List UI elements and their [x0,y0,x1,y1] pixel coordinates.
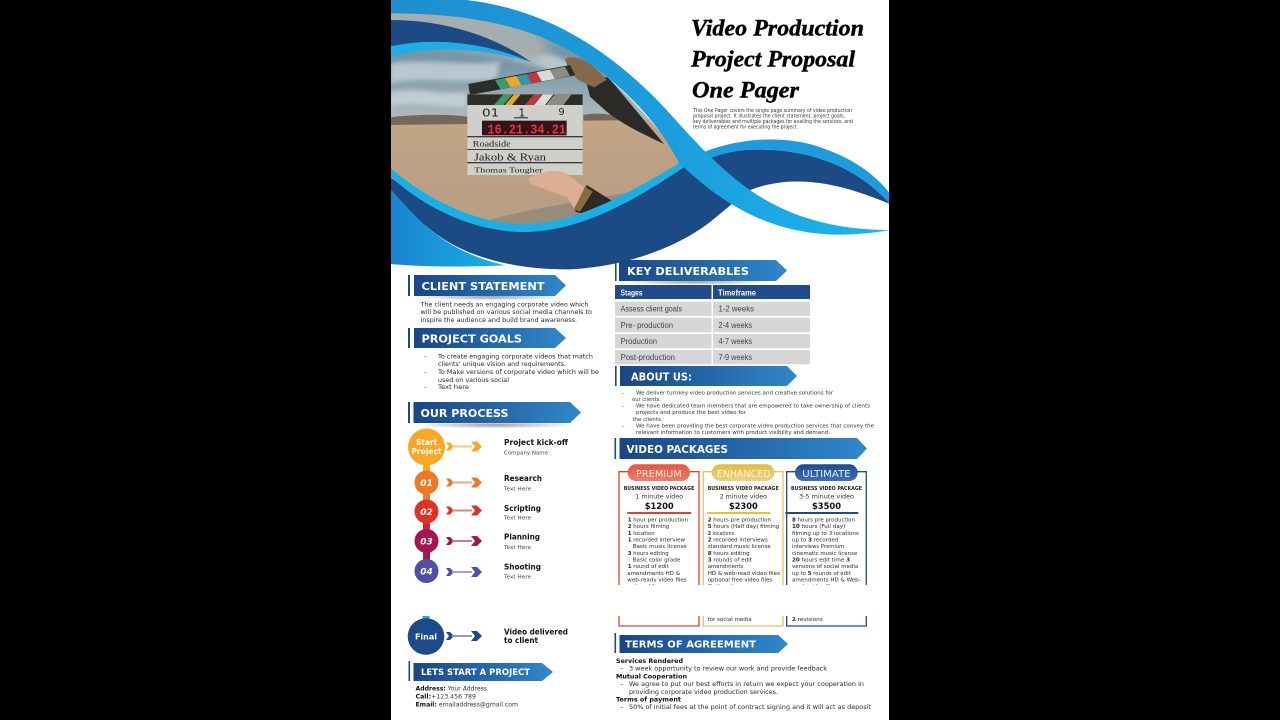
about us list: We have dedicated team members that are empowered to take ownership of clients [636,404,870,410]
final step: video delivered: Video delivered [504,628,568,636]
step: shooting [414,559,541,583]
package: enhanced: standard music license [708,544,771,550]
package: premium: 1 location [628,531,655,537]
heading: project goals [408,328,566,348]
package: premium: optional free [627,584,664,590]
heading: our process: OUR PROCESS [420,407,509,420]
final step: video delivered: Final [415,632,437,642]
table: stages and timeframe: Assess client goals [620,304,682,314]
about us list: our clients. [632,397,661,403]
package: premium: 1 round of edit [628,564,669,570]
title: Project Proposal [690,46,856,72]
table: stages and timeframe: 2-4 weeks [718,321,752,330]
package: premium: $1200 [645,502,674,512]
client statement text: The client needs an engaging corporate video which [419,302,589,308]
page background [391,0,889,720]
step: planning [414,529,540,562]
project goals list [424,354,599,391]
terms of agreement text: We agree to put our best efforts in return we expect your cooperation in [629,680,864,688]
about us list: We have been providing the best corporate video production services that convey the [636,424,874,430]
package: enhanced: $2300 [729,502,758,512]
client statement text: will be published on various social media channels to [420,309,592,316]
step: shooting: Shooting [504,562,541,571]
table: stages and timeframe: Timeframe [718,288,757,298]
project goals list: – [424,369,427,376]
table: stages and timeframe [615,285,810,364]
package: ultimate: filming up to 3 locations [792,531,859,537]
step: shooting: Text Here [503,574,532,580]
package remainders after the page break: 2 revisions [792,617,823,623]
project goals list: – [424,384,427,391]
package: premium: 2 hours filming [628,524,670,530]
package: ultimate: 10 hours (Full day) [792,524,845,530]
terms of agreement text: – [620,703,623,711]
heading: about us: ABOUT US: [631,370,692,384]
about us list: We deliver turnkey video production services and creative solutions for [636,390,834,396]
about us list: projects and produce the best video for [636,410,747,416]
photo: clapperboard in the desert [391,13,680,224]
heading: client statement [408,275,566,300]
table: stages and timeframe: 1-2 weeks [718,304,754,314]
package: ultimate: 3-5 minute video [799,492,854,500]
package: enhanced: 2 minute video [720,492,767,500]
package: premium: amendments HD & [627,571,681,577]
package: enhanced: HD & web-read video files [708,571,780,577]
package: enhanced: 2 hours pre production [708,518,771,524]
step: start project: Company Name [504,450,549,456]
package: ultimate: up to 5 rounds of edit [792,571,851,577]
project goals list: To Make versions of corporate video which will be [437,369,599,376]
package: ultimate: interviews Premium [792,544,844,550]
terms of agreement text: – [620,680,623,688]
final step: video delivered: to client [504,636,538,645]
contact details: Address: Your Address [416,685,488,693]
title [690,16,864,102]
table: stages and timeframe: 4-7 weeks [718,337,752,346]
project goals list: To create engaging corporate videos that match [437,354,593,360]
package: enhanced [703,464,783,626]
step: start project [408,428,569,474]
wave: navy lower [390,150,890,269]
package: premium: BUSINESS VIDEO PACKAGE [624,486,695,492]
heading: about us [615,366,797,386]
package: ultimate: $3500 [812,502,841,512]
step: research: 01 [420,479,433,489]
heading: video packages [614,438,867,459]
page break gap [391,585,889,616]
package: ultimate: cinematic music license [792,551,858,557]
project goals list: clients' unique vision and requirements. [438,361,566,368]
heading: terms of agreement: TERMS OF AGREEMENT [625,640,756,651]
package: ultimate: 20 hours edit time 3 [792,558,850,564]
table: stages and timeframe: Post-production [620,353,675,362]
step: planning: Text Here [503,545,532,551]
about us list [622,390,874,436]
package: premium: 3 hours editing [628,551,669,557]
about us list: – [622,424,625,430]
intro text: proposal project. It illustrates the client statement, project goals, [693,114,845,120]
step: scripting: Text Here [503,516,532,522]
package: premium: Basic music license [633,544,687,550]
package: premium: web-ready video files [627,578,687,584]
step: research: Text Here [503,487,532,493]
header wave artwork with photo [377,0,890,269]
step: research [414,470,542,502]
process timeline [408,428,569,583]
icon: clapperboard slate: Roadside [473,140,511,149]
heading: lets start a project: LETS START A PROJECT [421,668,530,678]
heading: project goals: PROJECT GOALS [422,333,522,346]
icon: clapper stick [468,65,575,95]
icon: clapperboard slate: 9 [558,107,565,118]
step: scripting [414,500,541,532]
package: premium: PREMIUM [636,469,682,480]
heading: lets start a project [408,661,553,681]
project goals list: used on various social [438,377,509,384]
package: ultimate: up to 3 recorded [792,538,839,544]
icon: lower hand and wrist [528,171,613,217]
table: stages and timeframe: Stages [620,288,643,298]
client statement text [419,302,592,324]
package: enhanced: optional free video files [708,578,772,584]
wave: cyan upper left [390,42,532,62]
table: stages and timeframe: Pre- production [620,321,673,330]
package: ultimate: amendments HD & Web- [792,578,861,584]
package: enhanced: ENHANCED [717,469,771,480]
wave: main swoosh [390,0,890,235]
package: enhanced: 2 locations [708,531,734,537]
terms of agreement text: Mutual Cooperation [616,672,687,680]
package: enhanced: 8 hours editing [708,551,750,557]
intro text: terms of agreement for executing the project. [693,125,798,131]
terms of agreement text: 3 week opportunity to review our work and provide feedback [629,665,827,673]
title: One Pager [692,78,800,102]
package: premium [619,464,699,626]
step: shooting: 04 [420,568,433,578]
package: enhanced: 5 hours (Half day) filming [708,524,780,530]
heading: key deliverables: KEY DELIVERABLES [627,265,749,278]
contact details: Call:+123 456 789 [416,693,476,701]
package: enhanced: BUSINESS VIDEO PACKAGE [708,486,779,492]
icon: clapperboard slate: Thomas Tougher [474,166,543,175]
terms of agreement text: Services Rendered [616,657,683,665]
intro text: key deliverables and multiple packages for availing the services, and [693,119,853,125]
intro text [692,108,853,131]
terms of agreement text: – [620,665,623,673]
package: ultimate: ULTIMATE [802,469,851,480]
project goals list: – [424,354,427,360]
package remainders after the page break [708,617,823,623]
package: premium: 1 recorded interview [628,538,685,544]
heading: our process [408,402,581,428]
package: enhanced: 3 rounds of edit [708,558,753,564]
icon: clapperboard slate: 16.21.34.21 [487,123,566,139]
package: ultimate: 8 hours pre production [792,518,855,524]
package: enhanced: amendments [708,564,743,570]
icon: clapperboard slate [467,94,583,175]
package: enhanced: Optional [708,584,733,590]
package remainders after the page break: for social media [708,617,752,623]
step: research: Research [504,474,542,483]
contact details: Email: emailaddress@gmail.com [416,701,518,709]
terms of agreement text [616,657,871,711]
heading: key deliverables [615,260,787,285]
client statement text: inspire the audience and build brand awareness. [420,317,577,324]
about us list: the clients. [632,417,663,423]
final step: video delivered [408,616,568,655]
project goals list: Text here [437,384,469,391]
wave: cyan right arc [705,140,889,203]
intro text: This One Pager covers the single page summary of video production [692,108,852,114]
heading: client statement: CLIENT STATEMENT [422,280,545,293]
wave: cyan under photo [390,163,683,232]
terms of agreement text: Terms of payment [616,696,681,704]
terms of agreement text: providing corporate video production services. [629,688,778,696]
step: start project: Project kick-off [504,438,569,447]
title: Video Production [691,16,864,40]
package: premium: Basic color grade [633,558,681,564]
icon: clapperboard slate: 1 [518,107,525,120]
icon: clapperboard slate: Jakob & Ryan [474,153,546,164]
wave: light blue lower left [391,190,505,266]
package: ultimate: BUSINESS VIDEO PACKAGE [791,486,863,492]
icon: clapperboard slate: 01 [482,107,499,120]
step: start project: Project [411,447,442,456]
wave: navy upper left [390,20,532,62]
package: ultimate: versions of social media [792,564,858,570]
step: scripting: Scripting [504,504,541,513]
package: premium: 1 hour per production [628,518,688,524]
icon: sleeve and upper hand [565,57,664,144]
terms of agreement text: 50% of initial fees at the point of contract signing and it will act as deposit [629,703,871,711]
package: ultimate: ready video files [792,584,837,590]
step: start project: Start [416,438,438,447]
package: premium: 1 minute video [635,492,683,500]
heading: terms of agreement [614,633,788,653]
contact details [416,685,518,709]
heading: video packages: VIDEO PACKAGES [626,443,728,456]
table: stages and timeframe: 7-9 weeks [718,353,752,362]
step: planning: Planning [504,533,540,542]
step: scripting: 02 [420,508,433,518]
package: ultimate [786,464,866,626]
about us list: relevant information to customers with product visibility and demand. [636,430,830,436]
step: planning: 03 [420,538,433,548]
package: enhanced: 2 recorded interviews [708,538,768,544]
about us list: – [622,390,625,396]
about us list: – [622,404,625,410]
table: stages and timeframe: Production [620,337,657,346]
